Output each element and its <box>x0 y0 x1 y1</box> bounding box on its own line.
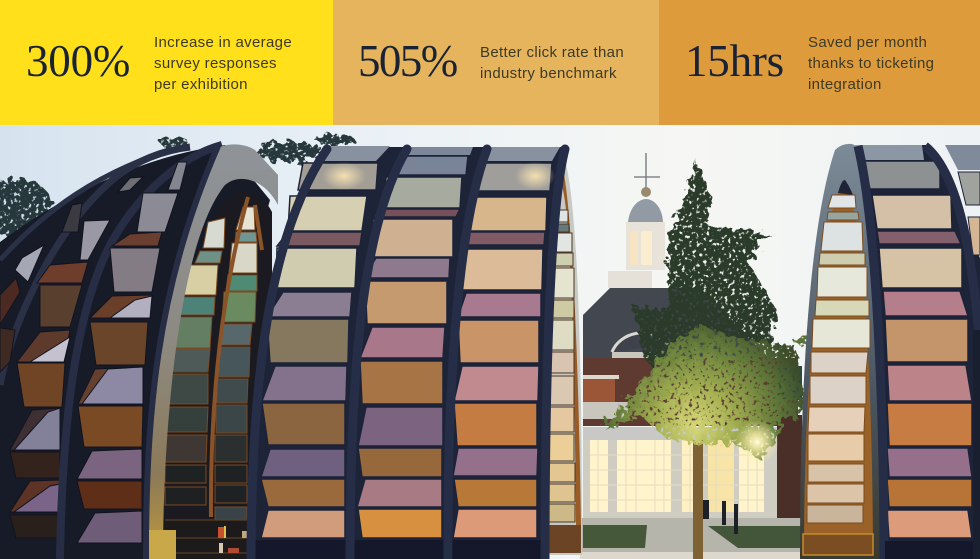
yellow base block <box>149 530 176 559</box>
background trees <box>0 135 355 238</box>
outer twig <box>794 337 830 347</box>
far rib <box>925 146 980 350</box>
end base <box>548 525 581 553</box>
stat description: survey responses: survey responses <box>154 55 277 72</box>
left pavilion <box>0 144 278 559</box>
tree <box>602 160 830 559</box>
body backing <box>858 145 980 559</box>
dark crown <box>632 160 778 400</box>
arch crown shadow <box>838 180 853 195</box>
stat number: 15hrs: 15hrs <box>685 36 784 86</box>
stat description: click rate: industry benchmark <box>480 65 617 82</box>
roof panel <box>855 145 924 160</box>
hedge <box>777 366 802 400</box>
right column panels <box>453 163 552 538</box>
centre pavilion <box>250 146 582 559</box>
dome body <box>0 145 270 559</box>
roof panels <box>322 146 560 161</box>
arch navy edge <box>146 146 218 559</box>
outer ribs <box>0 147 190 385</box>
stat description: ticketing integration: Saved per month <box>808 34 927 51</box>
panels <box>863 161 972 538</box>
entablature <box>583 427 778 440</box>
stat description: survey responses <box>154 34 292 93</box>
lamp flare <box>735 420 779 464</box>
stat description: survey responses: Increase in average <box>154 34 292 51</box>
grey arch shell <box>800 144 885 559</box>
stat description: ticketing integration: thanks to ticketing <box>808 55 934 72</box>
left column panels <box>261 163 378 538</box>
dormer <box>612 333 668 352</box>
cupola <box>608 153 665 288</box>
panels, left bay <box>0 177 143 538</box>
stat panel: 15hrs <box>659 0 980 125</box>
stat number: 505%: 505% <box>358 36 457 86</box>
end arch section <box>545 147 582 555</box>
body backing <box>250 147 565 559</box>
brick storey <box>583 358 798 426</box>
photo: pavilion and gallery at dusk <box>0 125 980 559</box>
middle column panels <box>357 156 468 538</box>
stat number: 300%: 300% <box>26 36 130 86</box>
end panels <box>807 195 870 523</box>
stat panel: 505% <box>333 0 659 125</box>
interior glazing, left column <box>165 218 225 505</box>
arch opening <box>804 180 873 555</box>
right pavilion <box>800 144 980 559</box>
sky <box>0 125 980 559</box>
stat description: ticketing integration: integration <box>808 76 882 93</box>
glazed ground floor <box>583 440 778 518</box>
base shadow <box>250 540 546 559</box>
interior glazing, right column <box>215 207 257 520</box>
panels, right bay <box>77 162 187 543</box>
bookshelf <box>165 520 250 559</box>
lit lower crown <box>602 325 806 462</box>
base shadow <box>885 541 980 559</box>
arch interior <box>163 192 272 559</box>
panel glows <box>322 162 366 190</box>
stat description: click rate <box>480 44 624 82</box>
end panels <box>548 210 575 522</box>
balcony <box>583 402 628 419</box>
stat panel: 300% <box>0 0 333 125</box>
panels beyond far rib <box>958 172 980 255</box>
stat description: click rate: Better click rate than <box>480 44 624 61</box>
timber base <box>803 534 873 555</box>
rib between bays <box>60 145 222 559</box>
ribs <box>251 149 565 559</box>
big arch face <box>148 144 278 559</box>
brick side wall <box>777 415 802 518</box>
gallery building <box>583 153 802 518</box>
stat description: ticketing integration <box>808 34 934 93</box>
slate roof <box>583 288 790 380</box>
stat description: survey responses: per exhibition <box>154 76 248 93</box>
ground <box>580 500 802 559</box>
interior wooden rib <box>211 197 262 517</box>
inner navy rib <box>858 146 884 559</box>
